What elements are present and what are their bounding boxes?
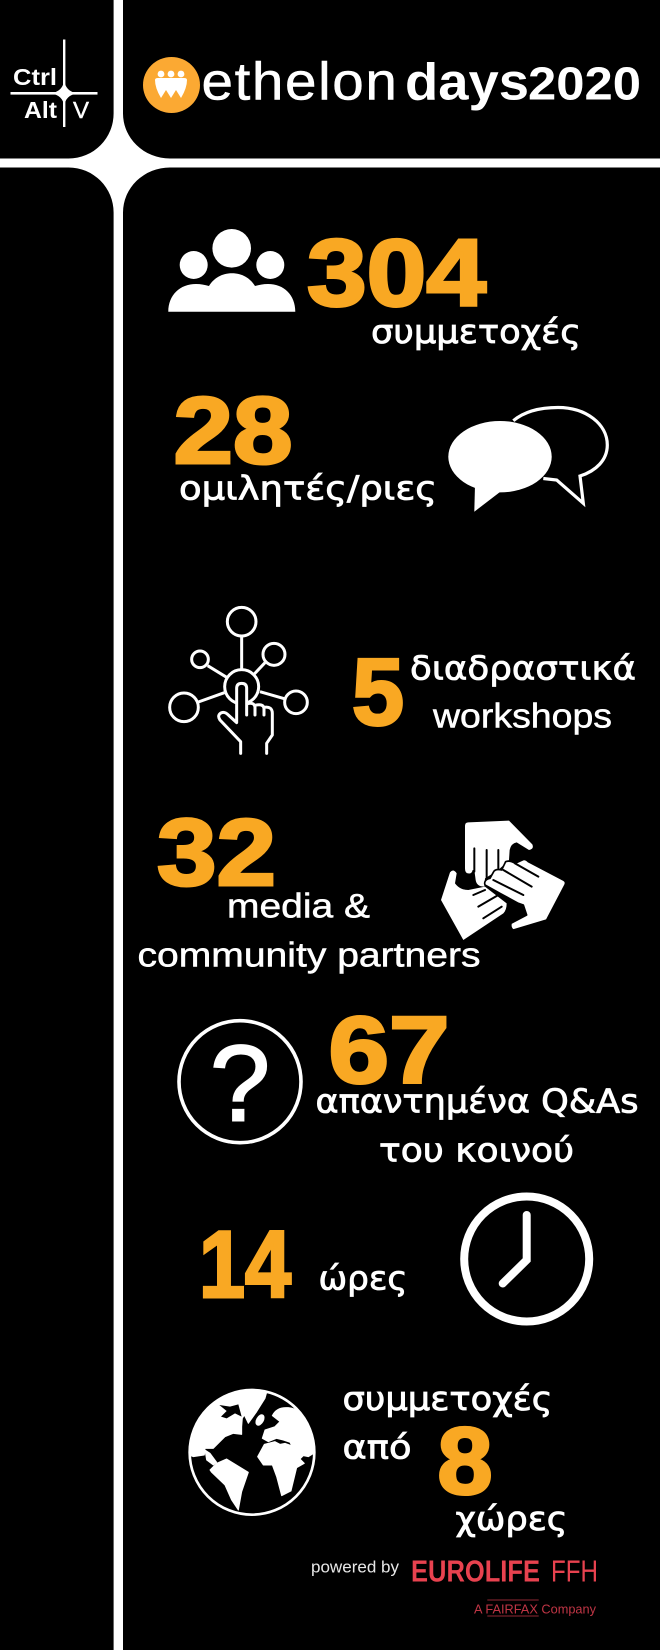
label: of the audience: του κοινού: [379, 1130, 574, 1170]
label: from: από: [342, 1428, 412, 1466]
Ctrl Alt V logo: [10, 40, 98, 127]
icon: globe: [190, 1390, 314, 1515]
icon: question mark in circle: [179, 1021, 301, 1144]
label: speakers: ομιλητές/ριες: [179, 468, 437, 508]
wordmark: days: days: [405, 54, 529, 112]
panel: 14 hours: [199, 1196, 589, 1322]
Ctrl Alt V logo: V: [73, 97, 90, 123]
panel: 8 countries: [190, 1379, 568, 1538]
panel: 5 workshops: [170, 607, 636, 753]
logo: A Fairfax Company: A FAIRFAX Company: [474, 1601, 596, 1616]
ethelon days 2020 logo: [143, 52, 641, 113]
icon: group of people: [168, 229, 295, 312]
sponsor: powered by Eurolife FFH: [311, 1554, 598, 1616]
logo: FFH: FFH: [551, 1554, 598, 1589]
label: countries: χώρες: [456, 1499, 568, 1538]
number: 67: 67: [328, 998, 450, 1104]
number: 5: 5: [352, 640, 404, 746]
icon: clock: [464, 1196, 589, 1322]
icon: network hub with pointing hand: [170, 607, 307, 753]
label: participations: συμμετοχές: [371, 312, 581, 351]
panel: 304 participations: [168, 220, 581, 351]
icon: stacked hands: [441, 821, 566, 940]
number: 304: 304: [307, 220, 486, 326]
Ctrl Alt V logo: Ctrl: [13, 64, 57, 90]
wordmark: 2020: 2020: [528, 58, 641, 110]
label: interactive: διαδραστικά: [410, 648, 636, 688]
icon: question mark in circle: ?: [210, 1022, 270, 1144]
label: answered Q&As: απαντημένα Q&As: [316, 1082, 638, 1120]
label: community partners: community partners: [138, 936, 481, 974]
panel: 67 answered questions: [179, 998, 638, 1170]
number: 14: 14: [199, 1212, 291, 1318]
label: hours: ώρες: [318, 1258, 408, 1298]
panel: 32 partners: [138, 800, 566, 974]
label: media and: media &: [227, 888, 370, 926]
icon: speech bubbles: [448, 408, 607, 512]
logo: EUROLIFE: EUROLIFE: [411, 1554, 540, 1589]
number: 32: 32: [157, 800, 276, 906]
label: powered by: powered by: [311, 1558, 399, 1576]
icon: orange circle with people: [143, 57, 200, 113]
label: workshops: workshops: [432, 698, 612, 736]
number: 8: 8: [438, 1408, 492, 1514]
panel: 28 speakers: [174, 378, 607, 512]
label: participations: συμμετοχές: [342, 1379, 552, 1418]
number: 28: 28: [174, 378, 292, 484]
wordmark: ethelon: ethelon: [202, 52, 398, 112]
Ctrl Alt V logo: Alt: [24, 97, 57, 123]
